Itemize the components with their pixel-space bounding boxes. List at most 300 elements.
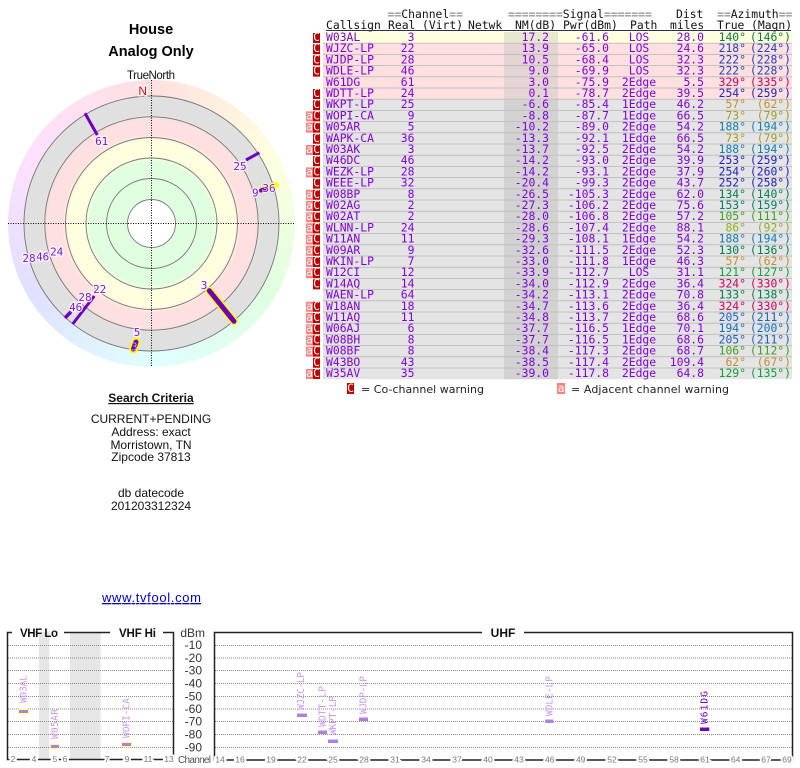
table header: NM(dB)	[515, 18, 556, 32]
true azimuth column: 133°	[719, 288, 746, 302]
adjacent-channel warning badges: a	[306, 310, 313, 324]
dBm axis	[178, 626, 211, 766]
co-channel warning badges: C	[313, 64, 320, 78]
signal power column: -92.5	[575, 142, 609, 156]
adjacent-channel warning badges: a	[306, 232, 313, 246]
real channel column: 25	[401, 97, 414, 111]
azimuth labels: 9	[252, 186, 259, 200]
true azimuth column: 153°	[719, 198, 746, 212]
real channel column: 24	[401, 86, 415, 100]
dBm axis: -50	[185, 690, 202, 704]
distance column: 24.6	[677, 41, 704, 55]
legend: co-channel warning: = Co-channel warning	[361, 383, 484, 396]
callsign column: W08BF	[326, 344, 360, 358]
true azimuth column: 62°	[725, 355, 746, 369]
UHF channel ticks: 64	[731, 754, 741, 764]
table header: (Virt)	[422, 18, 463, 32]
callsign column: WDTT-LP	[326, 86, 374, 100]
legend: adjacent channel warning: a	[558, 381, 564, 395]
magnetic azimuth column: (112°)	[750, 344, 791, 358]
spoke: channels 9 and 36	[261, 185, 276, 190]
path column: 2Edge	[622, 209, 656, 223]
callsign column: WLNN-LP	[326, 220, 374, 234]
noise margin column: 13.9	[522, 41, 549, 55]
callsign column: WOPI-CA	[326, 108, 374, 122]
co-channel warning badges: C	[313, 321, 320, 335]
real channel column: 32	[401, 176, 414, 190]
table header	[326, 7, 793, 32]
true azimuth column: 205°	[719, 310, 746, 324]
real channel column: 46	[401, 64, 415, 78]
signal power column: -92.1	[575, 131, 609, 145]
true azimuth column: 57°	[725, 254, 746, 268]
co-channel warning badges: C	[313, 52, 320, 66]
UHF channel ticks: 67	[761, 754, 771, 764]
VHF station markers: W03AL	[18, 675, 30, 703]
callsign column: W02AT	[326, 209, 360, 223]
real channel column: 14	[401, 276, 415, 290]
distance column: 32.3	[677, 52, 704, 66]
magnetic azimuth column: (211°)	[750, 332, 791, 346]
UHF channel ticks: 16	[235, 754, 245, 764]
signal power column: -61.6	[575, 30, 609, 44]
magnetic azimuth column: (79°)	[757, 131, 791, 145]
magnetic azimuth column: (258°)	[750, 176, 791, 190]
distance column: 36.4	[677, 299, 704, 313]
callsign column: W03AL	[326, 30, 360, 44]
distance column: 39.9	[677, 153, 704, 167]
path column: 2Edge	[622, 187, 656, 201]
search criteria block: db datecode	[118, 486, 184, 500]
co-channel warning badges: C	[313, 265, 320, 279]
callsign column: W46DC	[326, 153, 360, 167]
signal power column: -111.5	[568, 243, 609, 257]
dBm axis: -30	[185, 664, 202, 678]
signal power column: -107.4	[568, 220, 609, 234]
callsign column: WKPT-LP	[326, 97, 374, 111]
VHF station markers: WOPI-CA	[122, 698, 132, 738]
co-channel warning badges: C	[313, 355, 320, 369]
azimuth labels: 28	[78, 291, 92, 304]
azimuth labels: 46	[69, 301, 82, 314]
true azimuth column: 106°	[719, 344, 746, 358]
distance column: 66.5	[677, 131, 704, 145]
distance column: 68.6	[677, 332, 704, 346]
co-channel warning badges: C	[313, 86, 320, 100]
adjacent-channel warning badges: a	[306, 198, 313, 212]
signal power column: -106.2	[568, 198, 609, 212]
title: House	[129, 22, 173, 38]
spectrum chart: VHF panel	[8, 628, 174, 764]
callsign column: W61DG	[326, 75, 360, 89]
UHF channel ticks: 55	[638, 754, 648, 764]
signal power column: -87.7	[575, 108, 609, 122]
callsign column: W11AQ	[326, 310, 360, 324]
distance column: 46.2	[677, 97, 704, 111]
title: Analog Only	[108, 44, 194, 60]
true azimuth column: 218°	[719, 41, 746, 55]
path column: 2Edge	[622, 243, 656, 257]
co-channel warning badges: C	[313, 41, 320, 55]
path column: 1Edge	[622, 321, 656, 335]
true azimuth column: 324°	[719, 276, 746, 290]
magnetic azimuth column: (136°)	[750, 243, 791, 257]
VHF Lo heading: VHF Lo	[20, 628, 58, 640]
true azimuth column: 86°	[725, 220, 746, 234]
noise margin column: -14.2	[515, 153, 549, 167]
real channel column: 3	[408, 142, 414, 156]
true azimuth column: 222°	[719, 64, 746, 78]
real channel column: 9	[408, 108, 415, 122]
co-channel warning badges: C	[313, 344, 320, 358]
noise margin column: -20.4	[515, 176, 549, 190]
real channel column: 28	[401, 52, 415, 66]
table header: (Magn)	[751, 18, 792, 32]
table header: Path	[630, 18, 657, 32]
UHF channel ticks: 25	[328, 754, 338, 764]
true azimuth column: 73°	[725, 108, 746, 122]
true north label: TrueNorth	[127, 70, 175, 82]
real channel column: 36	[401, 131, 415, 145]
real channel column: 8	[408, 332, 415, 346]
magnetic azimuth column: (330°)	[750, 299, 791, 313]
table header: Pwr(dBm)	[563, 18, 618, 32]
path column: 2Edge	[622, 75, 656, 89]
callsign column: WKIN-LP	[326, 254, 374, 268]
noise margin column: -28.0	[515, 209, 549, 223]
UHF channel ticks: 28	[359, 754, 369, 764]
UHF channel ticks: 31	[390, 754, 400, 764]
spoke: channel 3 strong	[209, 291, 234, 321]
UHF channel ticks: 22	[297, 754, 307, 764]
true azimuth column: 324°	[719, 299, 746, 313]
magnetic azimuth column: (62°)	[757, 97, 791, 111]
callsign column: W05AR	[326, 120, 360, 134]
table header: Dist	[676, 7, 703, 21]
noise margin column: -27.3	[515, 198, 549, 212]
adjacent-channel warning badges: a	[306, 344, 313, 358]
path column: 2Edge	[622, 276, 656, 290]
distance column: 5.5	[683, 75, 704, 89]
title	[108, 22, 194, 60]
noise margin column: 10.5	[522, 52, 549, 66]
signal power column: -93.1	[575, 164, 609, 178]
noise margin column: 3.0	[528, 75, 549, 89]
legend: co-channel warning: C	[347, 381, 354, 395]
VHF station markers	[18, 675, 132, 750]
signal power column: -105.3	[568, 187, 609, 201]
signal power column: -113.7	[568, 310, 609, 324]
spoke: channel 61	[85, 113, 97, 135]
adjacent-channel warning badges: a	[306, 220, 313, 234]
UHF station markers	[296, 672, 710, 743]
signal power column: -108.1	[568, 232, 609, 246]
signal power column: -65.0	[575, 41, 609, 55]
noise margin column: 9.0	[528, 64, 549, 78]
table header: ========Signal=======	[508, 7, 652, 21]
co-channel warning badges: C	[313, 209, 320, 223]
true azimuth column: 188°	[719, 120, 746, 134]
UHF channel ticks: 58	[669, 754, 679, 764]
UHF channel ticks: 37	[452, 754, 462, 764]
callsign column: W14AQ	[326, 276, 360, 290]
magnetic azimuth column: (200°)	[750, 321, 791, 335]
distance column: 62.0	[677, 187, 704, 201]
distance column: 52.3	[677, 243, 704, 257]
adjacent-channel warning badges: a	[306, 265, 313, 279]
co-channel warning badges: C	[313, 120, 320, 134]
table header: True	[717, 18, 745, 32]
real channel column: 11	[401, 310, 415, 324]
distance column: 32.3	[677, 64, 704, 78]
UHF heading: UHF	[491, 626, 515, 640]
distance column: 43.7	[677, 176, 704, 190]
real channel column: 6	[408, 321, 415, 335]
UHF channel ticks: 61	[700, 754, 710, 764]
callsign column: W12CI	[326, 265, 360, 279]
path column: 2Edge	[622, 220, 656, 234]
azimuth labels: 61	[95, 135, 108, 148]
path column: 2Edge	[622, 176, 656, 190]
north marker: N	[138, 84, 147, 98]
VHF channel ticks	[11, 754, 174, 764]
co-channel warning badges: C	[313, 108, 320, 122]
noise margin column: -6.6	[522, 97, 549, 111]
signal power column: -93.0	[575, 153, 609, 167]
signal power column: -99.3	[575, 176, 609, 190]
azimuth labels: 3	[201, 279, 207, 292]
magnetic azimuth column: (194°)	[750, 120, 791, 134]
signal power column: -111.8	[568, 254, 609, 268]
true azimuth column: 188°	[719, 142, 746, 156]
path column: LOS	[629, 30, 649, 44]
noise margin column: -29.3	[515, 232, 549, 246]
UHF channel ticks: 46	[545, 754, 555, 764]
dBm axis: -60	[185, 702, 202, 716]
magnetic azimuth column: (228°)	[750, 64, 791, 78]
callsign column: W08BH	[326, 332, 360, 346]
signal power column: -85.4	[575, 97, 609, 111]
search criteria block: 201203312324	[111, 499, 191, 513]
noise margin column: 17.2	[522, 30, 549, 44]
path column: 2Edge	[622, 164, 656, 178]
UHF channel ticks: 14	[215, 754, 225, 764]
noise margin column: -34.7	[515, 299, 549, 313]
real channel column: 24	[401, 220, 415, 234]
true azimuth column: 121°	[719, 265, 746, 279]
VHF Hi heading: VHF Hi	[119, 628, 156, 640]
adjacent-channel warning badges: a	[306, 108, 313, 122]
signal power column: -68.4	[575, 52, 609, 66]
true azimuth column: 222°	[719, 52, 746, 66]
signal power column: -117.8	[568, 366, 609, 380]
co-channel warning badges: C	[313, 310, 320, 324]
table header: ==Channel==	[388, 7, 463, 21]
co-channel warning badges: C	[313, 299, 320, 313]
adjacent-channel warning badges: a	[306, 321, 313, 335]
UHF channel ticks: 43	[514, 754, 524, 764]
distance column: 36.4	[677, 276, 704, 290]
magnetic azimuth column: (224°)	[750, 41, 791, 55]
path column: 2Edge	[622, 299, 656, 313]
path column: LOS	[629, 64, 649, 78]
co-channel warning badges	[313, 30, 320, 380]
callsign column: W08BP	[326, 187, 360, 201]
true azimuth column: 105°	[719, 209, 746, 223]
adjacent-channel warning badges: a	[306, 299, 313, 313]
real channel column: 2	[408, 198, 414, 212]
UHF channel ticks: 19	[266, 754, 276, 764]
azimuth labels: 46	[36, 250, 49, 264]
website link: www.tvfool.com	[101, 590, 201, 605]
noise margin column: -32.6	[515, 243, 549, 257]
co-channel warning badges: C	[313, 232, 320, 246]
UHF channel ticks: 34	[421, 754, 431, 764]
path column: 1Edge	[622, 108, 656, 122]
magnetic azimuth column: (228°)	[750, 52, 791, 66]
UHF station markers: WJDP-LP	[358, 676, 370, 714]
signal power column: -117.3	[568, 344, 609, 358]
path column: 2Edge	[622, 86, 656, 100]
true azimuth column: 140°	[719, 30, 746, 44]
true azimuth column: 134°	[719, 187, 746, 201]
signal power column: -69.9	[575, 64, 609, 78]
co-channel warning badges: C	[313, 176, 320, 190]
table header: Real	[388, 18, 415, 32]
path column: 2Edge	[622, 355, 656, 369]
magnetic azimuth column: (140°)	[750, 187, 791, 201]
magnetic azimuth column: (62°)	[757, 254, 791, 268]
noise margin column: -37.7	[515, 332, 549, 346]
azimuth labels: 5	[134, 326, 140, 339]
path column: 1Edge	[622, 232, 656, 246]
path column: 2Edge	[622, 366, 656, 380]
adjacent-channel warning badges: a	[306, 209, 313, 223]
magnetic azimuth column: (67°)	[757, 355, 791, 369]
distance column: 70.1	[677, 321, 704, 335]
azimuth labels: 24	[50, 246, 64, 258]
signal power column: -116.5	[568, 321, 609, 335]
noise margin column: -13.7	[515, 142, 549, 156]
signal power column: -106.8	[568, 209, 609, 223]
co-channel warning badges: C	[313, 97, 320, 111]
UHF station markers: WJZC-LP	[296, 672, 307, 710]
magnetic azimuth column: (259°)	[750, 86, 791, 100]
signal power column: -112.9	[568, 276, 609, 290]
azimuth labels: 22	[93, 283, 106, 296]
noise margin column: -14.2	[515, 164, 549, 178]
noise margin column: -10.2	[515, 120, 549, 134]
real channel column: 61	[401, 75, 415, 89]
callsign column: WEZK-LP	[326, 164, 374, 178]
real channel column: 18	[401, 299, 415, 313]
magnetic azimuth column: (260°)	[750, 164, 791, 178]
table header: ==Azimuth==	[717, 7, 793, 21]
spoke: channels 22 and 28	[73, 296, 94, 324]
magnetic azimuth column: (194°)	[750, 232, 791, 246]
noise margin column: -28.6	[515, 220, 549, 234]
search criteria block: Address: exact	[111, 425, 191, 439]
true azimuth column: 329°	[719, 75, 746, 89]
VHF channel ticks: 2	[11, 754, 16, 764]
UHF channel ticks: 40	[483, 754, 493, 764]
distance column: 64.8	[677, 366, 704, 380]
VHF station markers: W05AR	[50, 709, 61, 739]
callsign column: W43BO	[326, 355, 360, 369]
callsign column: W02AG	[326, 198, 360, 212]
true azimuth column: 254°	[719, 164, 746, 178]
real channel column: 5	[408, 120, 414, 134]
adjacent-channel warning badges: a	[306, 332, 313, 346]
noise margin column: -37.7	[515, 321, 549, 335]
table data columns	[326, 30, 791, 380]
path column: 1Edge	[622, 131, 656, 145]
magnetic azimuth column: (111°)	[750, 209, 791, 223]
distance column: 37.9	[677, 164, 704, 178]
true azimuth column: 205°	[719, 332, 746, 346]
adjacent-channel warning badges: a	[306, 243, 313, 257]
table header: Netwk	[468, 18, 502, 32]
adjacent-channel warning badges	[306, 108, 313, 380]
callsign column: W03AK	[326, 142, 360, 156]
magnetic azimuth column: (159°)	[750, 198, 791, 212]
VHF channel ticks: 11	[144, 754, 153, 764]
co-channel warning badges: C	[313, 254, 320, 268]
dBm axis: -40	[185, 676, 202, 690]
table header: miles	[670, 18, 704, 32]
path column: LOS	[629, 52, 649, 66]
co-channel warning badges: C	[313, 332, 320, 346]
true azimuth column: 252°	[719, 176, 746, 190]
real channel column: 12	[401, 265, 414, 279]
real channel column: 8	[408, 344, 415, 358]
real channel column: 11	[401, 232, 415, 246]
true azimuth column: 129°	[719, 366, 746, 380]
co-channel warning badges: C	[313, 164, 320, 178]
callsign column: WJDP-LP	[326, 52, 374, 66]
noise margin column: 0.1	[528, 86, 549, 100]
distance column: 75.6	[677, 198, 704, 212]
path column: 2Edge	[622, 142, 656, 156]
distance column: 54.2	[677, 232, 704, 246]
table header: Callsign	[326, 18, 381, 32]
callsign column: WDLE-LP	[326, 64, 374, 78]
table rows background	[323, 32, 792, 379]
path column: LOS	[629, 41, 649, 55]
real channel column: 64	[401, 288, 415, 302]
signal power column: -117.4	[568, 355, 609, 369]
callsign column: W18AN	[326, 299, 360, 313]
path column: 2Edge	[622, 198, 656, 212]
noise margin column: -13.3	[515, 131, 549, 145]
distance column: 68.7	[677, 344, 704, 358]
azimuth labels: 25	[233, 160, 247, 173]
adjacent-channel warning badges: a	[306, 366, 313, 380]
search criteria block: CURRENT+PENDING	[91, 412, 211, 426]
UHF channel ticks: 52	[607, 754, 617, 764]
distance column: 70.8	[677, 288, 704, 302]
UHF station markers: WDTT-LP	[318, 686, 328, 727]
search criteria block	[91, 391, 211, 513]
magnetic azimuth column: (138°)	[750, 288, 791, 302]
co-channel warning badges: C	[313, 142, 320, 156]
UHF station markers: W61DG	[700, 691, 710, 724]
VHF channel ticks: 5	[53, 754, 58, 764]
real channel column: 35	[401, 366, 414, 380]
callsign column: WAPK-CA	[326, 131, 374, 145]
distance column: 28.0	[677, 30, 704, 44]
magnetic azimuth column: (259°)	[750, 153, 791, 167]
